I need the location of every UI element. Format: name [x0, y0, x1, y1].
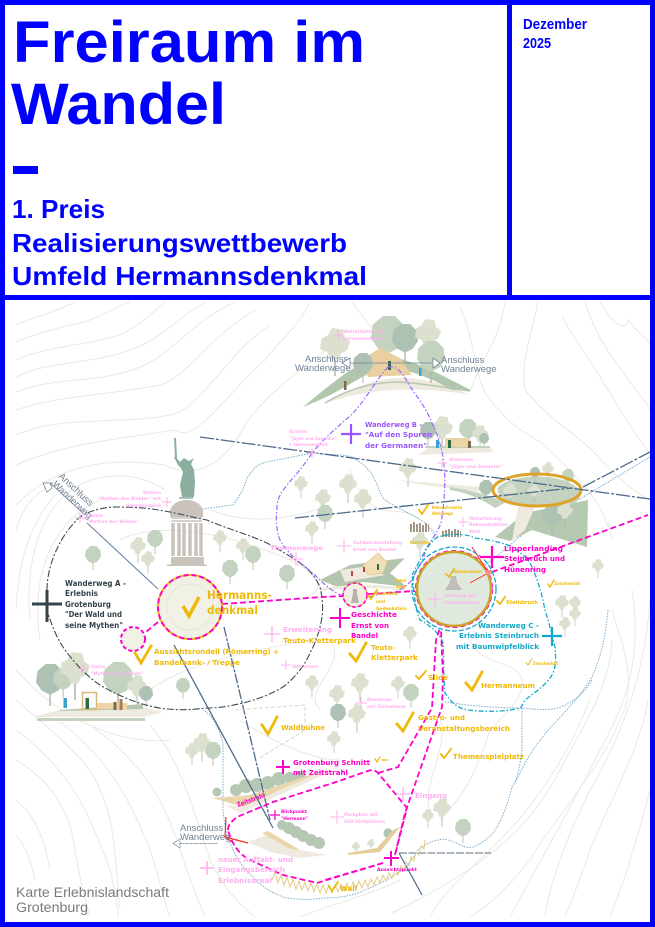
label: Wanderweg A: Wanderweg A - [65, 579, 126, 588]
label: Anschluss Wanderwege right: Wanderwege [441, 364, 497, 375]
label: Grotenburg Schnitt: mit Zeitstrahl [293, 769, 348, 777]
label: Weiterführung Wall: Wall [469, 529, 481, 534]
label: Themenspielplatz: Themenspielplatz [453, 753, 524, 761]
label: Parkplatz: Parkplatz mit [344, 812, 378, 817]
label: Themenspielplatz [441, 749, 524, 761]
label: Outdoorausstellung: Outdoorausstellung [353, 540, 402, 545]
label: Wanderweg A [32, 579, 126, 630]
label: Aussichtsrondell: Aussichtsrondell (Römerring) + [154, 648, 279, 656]
scene: trees and viewing gate on Wanderweg A [32, 652, 163, 721]
label: Station Mythen des Waldes lower [75, 513, 139, 524]
label: Gastro- und Veranstaltungsbereich [397, 713, 510, 733]
label: Rekonstruierte Wehrwege: Wehrwege [432, 511, 453, 516]
label: Slide [416, 671, 448, 682]
label: Hermannsdenkmal: denkmal [207, 603, 258, 617]
title: Freiraum im [13, 10, 365, 75]
label: small check [375, 757, 387, 762]
label: Rekonstruierte Wehrwege: Rekonstruierte [432, 505, 462, 510]
label: Waldbühne [262, 717, 325, 734]
label: Weiterführung Wall: Weiterführung [469, 516, 502, 521]
arrow: Anschluss Wanderweg west [43, 483, 83, 513]
label: Wall: Wall [340, 885, 357, 893]
label: Anschluss Wanderwege left: Wanderwege [295, 363, 351, 374]
label: Grotenburg Schnitt [276, 759, 371, 777]
label: Anschluss Wanderweg west: Wanderweg [50, 479, 94, 522]
label: Station Mythen des Waldes lower: Station [86, 513, 103, 518]
title dash [13, 166, 38, 174]
subtitle [12, 194, 367, 291]
title: Wandel [11, 72, 226, 137]
label: Weiterführung Wall: Rekonstruktion [469, 522, 508, 527]
label: Rekonstruierte Wehrwege [419, 505, 462, 516]
label: Station Jäger und Sammler west: Station [289, 429, 307, 434]
label: Outdoorausstellung: Ernst von Bandel [353, 547, 397, 552]
label: Geschichte Ernst von Bandel: Bandel [351, 632, 378, 640]
arrow: Anschluss Wanderweg south [173, 839, 218, 848]
label: Wanderweg C [456, 622, 562, 651]
label: Aussichtspunkt: Aussichtspunkt [377, 867, 417, 872]
label: Anschluss Wanderweg west: Anschluss [56, 471, 95, 509]
label: Wanderweg A: Grotenburg [65, 600, 111, 609]
trees scattered over the map [85, 458, 604, 843]
trail: Wanderweg A dashed loop [47, 507, 323, 710]
title [11, 10, 365, 137]
label: Lipperlanding Steinbruch Hünenring: Lipperlanding [504, 545, 563, 553]
label: Bandelbank und Gedenkstein: Bandelbank [376, 591, 398, 596]
label: Stationen Jäger und Sammler east: "Jäger und Sammler" [449, 464, 503, 469]
label: Zwischenhalt lower: Zwischenhalt [533, 661, 558, 666]
label: Eingang [396, 787, 447, 801]
label: Lipperlanding Steinbruch Hünenring: Hünenring [504, 566, 546, 574]
scene: Outdoorausstellung Ernst von Bandel [320, 553, 407, 590]
label: Aussichtsturm: Kletterer [410, 540, 430, 545]
label: Wanderweg B: der Germanen" [365, 442, 427, 450]
label: Lichtung: Fichtenbrunnen [444, 600, 479, 605]
label: Parkplatz [330, 810, 385, 824]
red viewing marker [225, 817, 248, 843]
label: Outdoorausstellung [337, 539, 402, 553]
label: Hünenmauern: Hünenmauern [453, 569, 482, 574]
label: Teuto-Kletterpark: Kletterpark [371, 654, 418, 662]
label: Anschluss Wanderweg south [180, 823, 230, 843]
label: Blickpunkt Hermann: Blickpunkt [281, 809, 307, 814]
label: Slide: Slide [428, 674, 448, 682]
caption: Karte Erlebnislandschaft Grotenburg: Grotenburg [16, 900, 88, 915]
label: Wetterhütte: Wetterhütte mit [343, 329, 383, 334]
label: Wanderweg A: Erlebnis [65, 589, 99, 598]
monument: Hermannsdenkmal statue and temple [167, 438, 207, 566]
label: Station Mythen des Waldes lower: "Mythen des Waldes" [87, 519, 139, 524]
scene: Hünenring with circular walkway [395, 462, 588, 547]
label: Wetterhütte: Germanenhaus [343, 336, 383, 341]
label: Station Mythen vom Walde: "Mythen vom Walde" [91, 671, 143, 676]
label: Wanderweg A: seine Mythen" [65, 621, 123, 630]
caption: Karte Erlebnislandschaft Grotenburg: Karte Erlebnislandschaft [16, 885, 169, 900]
label: Abenteuer [355, 697, 406, 709]
scene: Blickpunkt wedge [248, 820, 327, 858]
label: Blickpunkt Hermann [270, 809, 308, 821]
label: Steinbruch: Steinbruch [506, 600, 538, 606]
label: Gastro- und Veranstaltungsbereich: Gastro- und [418, 714, 465, 722]
caption: Karte Erlebnislandschaft Grotenburg [16, 885, 169, 915]
label: Eingang: Eingang [415, 792, 447, 800]
label: Hermanneum [466, 672, 535, 690]
date: Dezember [523, 17, 587, 33]
label: Parkplatz: 300 Stellplätzen [344, 819, 385, 824]
label: Aussichtspunkt [377, 851, 417, 872]
label: Hermanneum: Hermanneum [481, 682, 535, 690]
label: Lipperlanding Steinbruch Hünenring [480, 545, 565, 574]
trail: Wanderweg B purple loop [276, 367, 445, 598]
label: Hermannsdenkmal [207, 588, 272, 617]
label: Aussichtsrondell [135, 646, 279, 667]
label: Hermannsdenkmal: Hermanns- [207, 588, 272, 602]
label: Anschluss Wanderweg south: Anschluss [180, 823, 224, 834]
label: Lipperlanding Steinbruch Hünenring: Steinbruch und [504, 555, 565, 563]
label: Bandelbank und Gedenkstein: Gedenkstein [376, 606, 407, 611]
label: Geschichte Ernst von Bandel [330, 608, 397, 640]
label: Abenteuer: mit Teilnehmer [367, 704, 406, 709]
scene: Wetterhütte on the hill with trees [303, 316, 471, 407]
label: Stationen Jäger und Sammler east: Stationen [449, 457, 473, 462]
label: neuer Auftakt: Erlebnisareal [218, 877, 272, 885]
label: Anschluss Wanderweg south: Wanderweg [180, 832, 230, 843]
label: Anschluss Wanderwege left [295, 354, 351, 374]
label: Wanderweg B: Wanderweg B - [365, 421, 422, 429]
label: Themenwege [270, 544, 324, 566]
label: Wall [329, 882, 357, 893]
label: Steinbruch [497, 597, 538, 606]
trail: magenta main axis and loop [146, 515, 648, 883]
label: Bandelbank und Gedenkstein: und [376, 599, 385, 604]
label: Klettertiere [281, 660, 318, 670]
label: Abenteuer: Abenteuer [367, 697, 392, 702]
label: Station Mythen des Waldes upper: Hermannsblick [126, 503, 161, 508]
label: Gastro- und Veranstaltungsbereich: Veranstaltungsbereich [418, 725, 510, 733]
label: Blickpunkt Hermann: "Hermann" [281, 816, 308, 821]
label: Zwischenhalt upper: Zwischenhalt [554, 581, 580, 586]
label: Gedenkweg: weg [396, 584, 405, 589]
label: Station Jäger und Sammler west: + Hermannsblick [289, 442, 328, 447]
label: Wetterhütte [333, 329, 383, 341]
label: Teuto-Kletterpark: Teuto- [371, 644, 395, 652]
label: Station Jäger und Sammler west: "Jäger und Sammler" [290, 436, 337, 441]
label: Anschluss Wanderwege left: Anschluss [305, 354, 349, 365]
Bandel small circle [343, 583, 367, 607]
label: Hünenmauern [446, 569, 482, 577]
scene: Parkplatz embankment [348, 827, 400, 855]
label: Station Mythen des Waldes upper: Station [143, 490, 161, 495]
date: 2025 [523, 36, 551, 52]
label: neuer Auftakt: Eingangsbereich [218, 866, 285, 874]
label: neuer Auftakt [200, 856, 293, 885]
date [523, 17, 587, 52]
label: Aussichtsrondell: Bandelbank- / Treppe [154, 659, 240, 667]
label: Station Mythen vom Walde: Station [91, 664, 105, 669]
chart: zigzag wall along the southern edge [272, 840, 425, 893]
arrow: Anschluss Wanderwege connector [342, 358, 440, 368]
label: Station Mythen vom Walde [78, 664, 143, 676]
label: Bandelbank und Gedenkstein [368, 590, 407, 611]
label: Stationen Jäger und Sammler east [437, 457, 503, 469]
label: Wanderweg B [341, 421, 432, 450]
label: Anschluss Wanderwege right [441, 355, 497, 375]
label: Station Mythen des Waldes upper: "Mythen des Waldes" mit [98, 496, 161, 501]
panel: terrain map contour lines [16, 302, 650, 917]
icon: palisade walls [410, 522, 461, 537]
label: Wanderweg A: "Der Wald und [65, 610, 122, 619]
label: Waldbühne: Waldbühne [281, 724, 325, 732]
label: Grotenburg Schnitt: Grotenburg Schnitt [293, 759, 371, 767]
label: Teuto-Kletterpark [350, 643, 418, 662]
thin blue dotted trail [202, 453, 650, 899]
Hermann memorial circle [158, 575, 222, 639]
label: Weiterführung Wall [458, 516, 508, 534]
label: Themenwege: Themenwege [270, 544, 324, 552]
Aussichtsrondell small circle [121, 627, 145, 651]
label: Wanderweg B: "Auf den Spuren [365, 431, 432, 439]
scene: Zeitstrahl wedge [212, 769, 332, 813]
label: Station Jäger und Sammler west [289, 429, 337, 458]
label: Wanderweg C: Wanderweg C - [478, 622, 539, 630]
label: Erweiterung Teuto-Kletterpark [264, 626, 356, 645]
label: Geschichte Ernst von Bandel: Ernst von [351, 622, 389, 630]
label: Gedenkweg: Gedenk- [396, 578, 407, 583]
label: Gedenkweg [396, 578, 407, 589]
subtitle: Umfeld Hermannsdenkmal [12, 261, 367, 291]
label: Erweiterung Teuto-Kletterpark: Erweiterung [283, 626, 332, 634]
label: Station Mythen des Waldes upper [98, 490, 172, 508]
label: neuer Auftakt: neuer Auftakt- und [218, 856, 293, 864]
label: Anschluss Wanderwege right: Anschluss [441, 355, 485, 366]
label: Lichtung [428, 591, 479, 607]
label: Zeitstrahl: Zeitstrahl [236, 791, 266, 809]
label: Geschichte Ernst von Bandel: Geschichte [351, 611, 397, 619]
label: Wanderweg C: Erlebnis Steinbruch [459, 632, 539, 640]
label: Wanderweg C: mit Baumwipfelblick [456, 643, 539, 651]
label: Lichtung: Lichtung mit [444, 593, 476, 598]
subtitle: 1. Preis [12, 194, 105, 224]
scene: Stationen Jäger und Sammler [418, 416, 493, 455]
Hünenring circle with obelisk [412, 547, 496, 631]
trail: Wanderweg C cyan route [412, 534, 556, 711]
subtitle: Realisierungswettbewerb [12, 228, 347, 258]
magenta and slate connections [87, 437, 650, 895]
label: Zwischenhalt upper [548, 580, 580, 587]
label: Klettertiere: Klettertiere [292, 664, 318, 669]
label: Zwischenhalt lower [526, 659, 558, 666]
label: Erweiterung Teuto-Kletterpark: Teuto-Kletterpark [283, 637, 356, 645]
